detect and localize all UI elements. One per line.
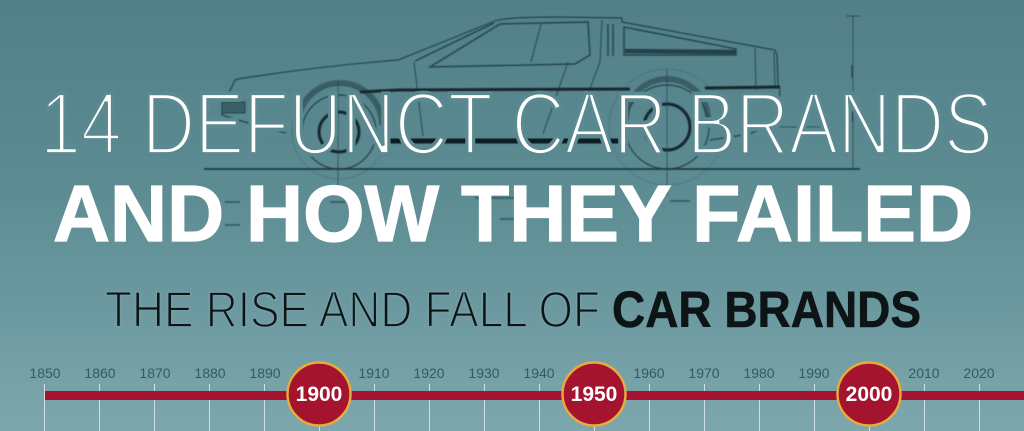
subtitle (105, 281, 921, 338)
timeline decade labels: 1880 (194, 365, 226, 381)
subtitle: THE RISE AND FALL OF (105, 281, 600, 338)
timeline decade labels (29, 365, 995, 381)
timeline decade labels: 1970 (688, 365, 720, 381)
timeline decade labels: 1940 (523, 365, 555, 381)
timeline decade labels: 1850 (29, 365, 61, 381)
door lines (414, 20, 775, 136)
timeline ticks (44, 384, 980, 431)
car body outline (222, 17, 780, 142)
front bumper (222, 102, 245, 113)
timeline decade labels: 1920 (413, 365, 445, 381)
timeline decade labels: 2020 (963, 365, 995, 381)
marker 1950: 1950 (571, 383, 617, 406)
marker 2000: 2000 (846, 383, 892, 406)
timeline decade labels: 1980 (743, 365, 775, 381)
timeline decade labels: 1990 (798, 365, 830, 381)
dimension lines (338, 16, 860, 195)
subtitle: CAR BRANDS (612, 281, 921, 338)
marker 2000 (838, 362, 900, 426)
marker 1900: 1900 (296, 383, 342, 406)
timeline decade labels: 2010 (908, 365, 940, 381)
front wheel (292, 83, 386, 179)
timeline decade labels: 1930 (468, 365, 500, 381)
timeline decade labels: 1890 (249, 365, 281, 381)
marker 1900 (288, 362, 350, 426)
timeline bar (45, 391, 1024, 400)
marker 1950 (562, 362, 626, 426)
timeline decade labels: 1910 (358, 365, 390, 381)
windows (415, 22, 736, 67)
drawing notes (225, 65, 852, 225)
ground line (204, 168, 860, 170)
timeline decade labels: 1960 (633, 365, 665, 381)
title line 2: AND HOW THEY FAILED (53, 169, 973, 258)
rear wheel (609, 69, 725, 185)
car blueprint illustration (204, 16, 860, 225)
timeline decade labels: 1860 (84, 365, 116, 381)
timeline decade labels: 1870 (139, 365, 171, 381)
belt and sill lines (360, 87, 780, 92)
